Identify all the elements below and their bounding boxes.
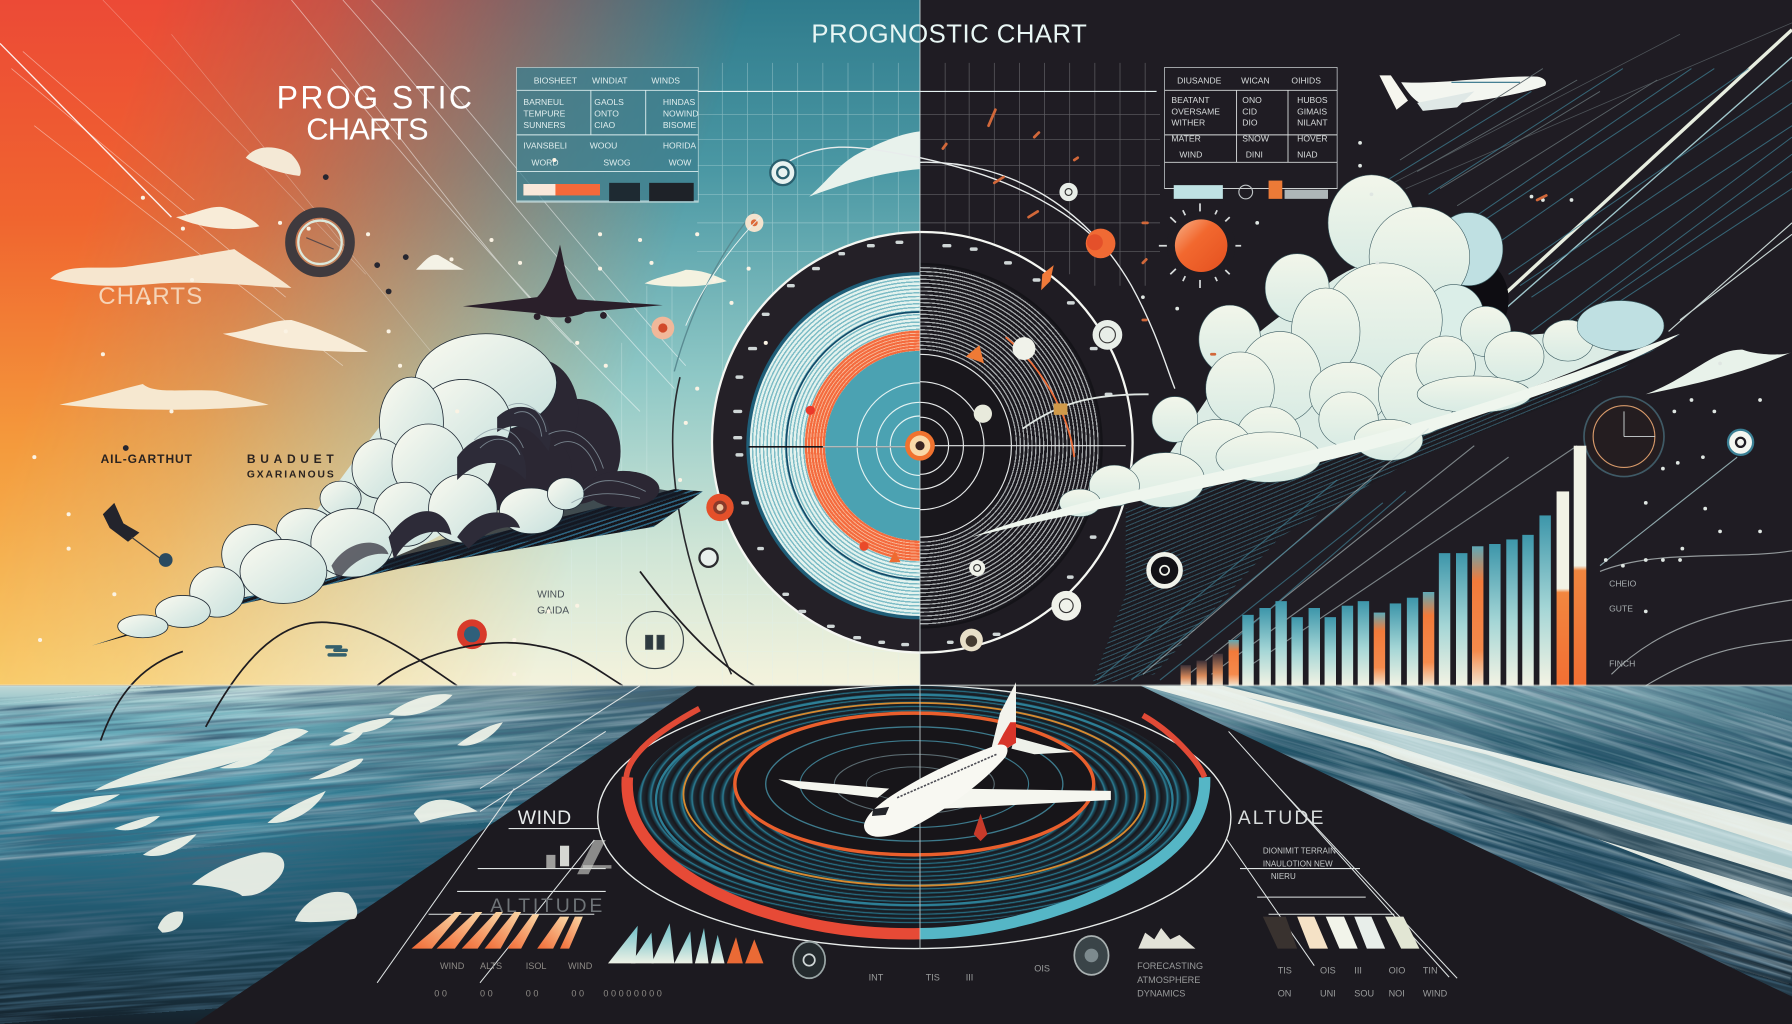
foam patches on the left sea <box>50 694 503 933</box>
right table: WIND <box>1179 150 1202 160</box>
disc upper red arcs <box>626 709 1205 777</box>
cloud base streak <box>971 334 1680 537</box>
small cloud: middle <box>223 320 368 352</box>
small labels near bars: CHEIO <box>1609 578 1637 588</box>
left table: BISOME <box>663 120 696 130</box>
plane stabilizer <box>1011 737 1074 754</box>
black arcs lower left <box>101 571 754 741</box>
cloud lobes <box>1059 175 1664 517</box>
small cloud tail <box>1646 350 1792 394</box>
left storm cloud <box>91 334 703 646</box>
label: small chart text: WIND <box>537 590 565 601</box>
main title: PROGNOSTIC CHART <box>811 20 1087 48</box>
right table: GIMAIS <box>1297 106 1327 116</box>
right table: WICAN <box>1241 75 1270 85</box>
bottom captions right: WIND <box>1423 989 1448 999</box>
lines in dark sky lower right <box>1097 429 1792 686</box>
plane tail fin <box>989 682 1016 760</box>
right table: DIUSANDE <box>1177 75 1222 85</box>
bottom teal spikes <box>608 923 725 963</box>
label: left dark text: GXARIANOUS <box>247 470 334 481</box>
background: left warm-to-teal sky <box>0 0 920 686</box>
left table: WOOU <box>590 141 617 151</box>
right sea <box>1140 686 1792 996</box>
bottom captions left: 0 0 <box>571 989 584 999</box>
left cloud wedge <box>91 489 703 646</box>
right table: NILANT <box>1297 118 1328 128</box>
radar tick marks <box>735 242 1111 645</box>
label: left dark text: AIL-GARTHUT <box>101 452 193 466</box>
label: wind: WIND <box>518 807 572 829</box>
icon: dark supersonic plane left <box>463 245 663 323</box>
bottom captions right: ATMOSPHERE <box>1137 975 1200 985</box>
plane tail fin red panel <box>991 722 1016 758</box>
diagonal wind streaks right <box>1371 23 1792 331</box>
left table: SUNNERS <box>523 120 566 130</box>
left table: GAOLS <box>594 97 624 107</box>
marker: ring right <box>1728 430 1753 455</box>
bottom captions left: ALTS <box>480 961 502 971</box>
bottom captions right: TIN <box>1423 966 1438 976</box>
altitude text block <box>1263 847 1336 881</box>
bottom captions right: FORECASTING <box>1137 961 1203 971</box>
bar chart <box>1181 446 1586 686</box>
left table: TEMPURE <box>523 109 566 119</box>
grid: right chart grid <box>920 63 1160 286</box>
altitude text block: NIERU <box>1271 872 1296 881</box>
bottom captions left: WIND <box>440 961 465 971</box>
left table: WOW <box>669 158 692 168</box>
markers around the radar <box>651 160 1078 567</box>
bottom captions right: ON <box>1278 989 1291 999</box>
right table: SNOW <box>1242 134 1270 144</box>
left table: WORD <box>531 158 559 168</box>
bottom captions right: OIS <box>1034 963 1050 973</box>
bottom captions left: 0 0 0 0 0 0 0 0 <box>603 989 662 999</box>
bottom captions right: III <box>1354 966 1362 976</box>
right storm cloud <box>971 175 1792 686</box>
speckles left sky <box>34 160 766 674</box>
bottom right bars <box>1263 917 1419 949</box>
bottom captions right <box>869 961 1448 999</box>
cloud dark backing <box>457 359 659 512</box>
left table: BARNEUL <box>523 97 564 107</box>
speck cluster <box>327 647 346 655</box>
small cloud: upper left <box>246 147 301 176</box>
grid: left chart grid <box>549 63 920 686</box>
cloud hatch strokes <box>474 403 646 503</box>
marker: red lower left <box>457 619 487 649</box>
bottom captions right: OIS <box>1320 966 1336 976</box>
small cloud: right of ring <box>416 255 464 270</box>
cloud lobes <box>118 334 584 638</box>
markers on the lower radar rim <box>960 554 1181 651</box>
speckles dark <box>126 177 406 448</box>
left table: SWOG <box>603 158 631 168</box>
left table <box>517 67 699 202</box>
left sea <box>0 686 697 1024</box>
small cloud: near ring <box>176 207 259 229</box>
right table: CID <box>1242 106 1257 116</box>
radar centre hub <box>905 431 935 461</box>
label: altude: ALTUDE <box>1238 807 1323 829</box>
cloud backing mass <box>1143 259 1636 494</box>
icon: white plane right <box>1379 75 1546 111</box>
bottom captions right: UNI <box>1320 989 1336 999</box>
right table: MATER <box>1171 134 1201 144</box>
cloud shadow <box>1440 258 1509 341</box>
left table: HORIDA <box>663 141 696 151</box>
right table: ONO <box>1242 95 1262 105</box>
disc teal band <box>920 777 1205 934</box>
radar left half <box>710 230 920 654</box>
left sky diagonal wind lines <box>0 0 686 411</box>
altitude text block: INAULOTION NEW <box>1263 859 1333 868</box>
left table: HINDAS <box>663 97 695 107</box>
small cloud: charts background <box>50 249 291 288</box>
small labels near bars <box>1609 578 1637 668</box>
left table: WINDIAT <box>592 75 628 85</box>
icon: sun <box>1159 203 1241 288</box>
dial right <box>1074 936 1109 975</box>
bottom captions left: WIND <box>568 961 593 971</box>
radar markers <box>706 229 1149 562</box>
bottom left orange bars <box>411 912 583 949</box>
radar right half <box>920 230 1134 654</box>
small cloud: by the radar <box>645 270 727 287</box>
bottom captions right: SOU <box>1354 989 1374 999</box>
small cloud: top at split <box>809 131 920 197</box>
background: dark lower floor <box>0 686 1792 1024</box>
chart dial lower left <box>626 611 683 669</box>
bottom captions right: DYNAMICS <box>1137 989 1185 999</box>
left table: CIAO <box>594 120 616 130</box>
bottom small cluster <box>1138 928 1195 949</box>
divider line <box>697 90 1157 92</box>
main white plane <box>778 682 1111 837</box>
heading: prognostic charts: PROG STIC <box>277 80 472 116</box>
icon: dark ring left <box>290 213 350 272</box>
plane windscreen <box>872 807 889 816</box>
plane fuselage <box>864 745 1008 837</box>
label: altitude: ALTITUDE <box>490 895 602 917</box>
left table: WINDS <box>651 75 680 85</box>
cloud dark folds <box>331 407 551 581</box>
radar: outer arc and construction lines <box>673 147 1175 674</box>
left table: IVANSBELI <box>523 141 567 151</box>
bottom captions left: 0 0 <box>526 989 538 999</box>
left table: ONTO <box>594 109 619 119</box>
right table: HUBOS <box>1297 95 1328 105</box>
bottom captions right: NOI <box>1389 989 1405 999</box>
heading: prognostic charts <box>277 80 472 146</box>
radar vertical axis <box>919 0 921 686</box>
bottom orange spikes <box>727 937 763 963</box>
speckles orange dark area <box>943 110 1546 354</box>
small labels near bars: GUTE <box>1609 603 1633 613</box>
bottom captions right: TIS <box>1278 966 1292 976</box>
radar disc <box>706 0 1149 686</box>
right table: HOVER <box>1297 134 1328 144</box>
bottom captions left <box>434 961 662 999</box>
bottom captions right: OIO <box>1389 966 1405 976</box>
disc red band <box>627 777 920 934</box>
background: right dark sky <box>920 0 1792 686</box>
left table: NOWIND <box>663 109 699 119</box>
right table: NIAD <box>1297 150 1318 160</box>
label: small chart text <box>537 590 569 617</box>
right table <box>1165 67 1337 199</box>
bottom captions right: III <box>966 973 973 983</box>
speckles right sky <box>1143 143 1760 611</box>
left table: BIOSHEET <box>534 75 578 85</box>
dial left <box>793 942 825 978</box>
bottom captions left: 0 0 <box>480 989 493 999</box>
right table: DINI <box>1246 150 1263 160</box>
icon: dark bird marker left <box>103 503 173 567</box>
wind gauge <box>1584 397 1664 477</box>
heading: prognostic charts: CHARTS <box>306 111 429 146</box>
label: left dark text <box>101 452 334 481</box>
plane left wing <box>778 779 889 798</box>
right table: OIHIDS <box>1291 75 1321 85</box>
right table: OVERSAME <box>1171 106 1220 116</box>
small labels near bars: FINCH <box>1609 658 1635 668</box>
label: charts on cloud: CHARTS <box>98 283 203 310</box>
plane right wing <box>931 789 1111 809</box>
bottom captions right: TIS <box>926 973 940 983</box>
altitude text block: DIONIMIT TERRAIN <box>1263 847 1336 856</box>
bottom captions right: INT <box>869 973 884 983</box>
small cloud: lower left <box>59 384 269 410</box>
wind glyph block <box>546 840 611 874</box>
horizon strip <box>0 685 1792 686</box>
right table: WITHER <box>1171 118 1205 128</box>
right cloud wedge <box>1091 335 1680 686</box>
lower panel structure lines <box>377 686 1457 983</box>
cloud backing mass <box>194 361 504 606</box>
label: left dark text: BUADUET <box>247 452 334 466</box>
right table: BEATANT <box>1171 95 1210 105</box>
right table: DIO <box>1242 118 1258 128</box>
bottom captions left: ISOL <box>526 961 547 971</box>
lower radar disc <box>598 686 1231 949</box>
bottom captions left: 0 0 <box>434 989 447 999</box>
label: small chart text: GAIDA <box>537 606 569 617</box>
